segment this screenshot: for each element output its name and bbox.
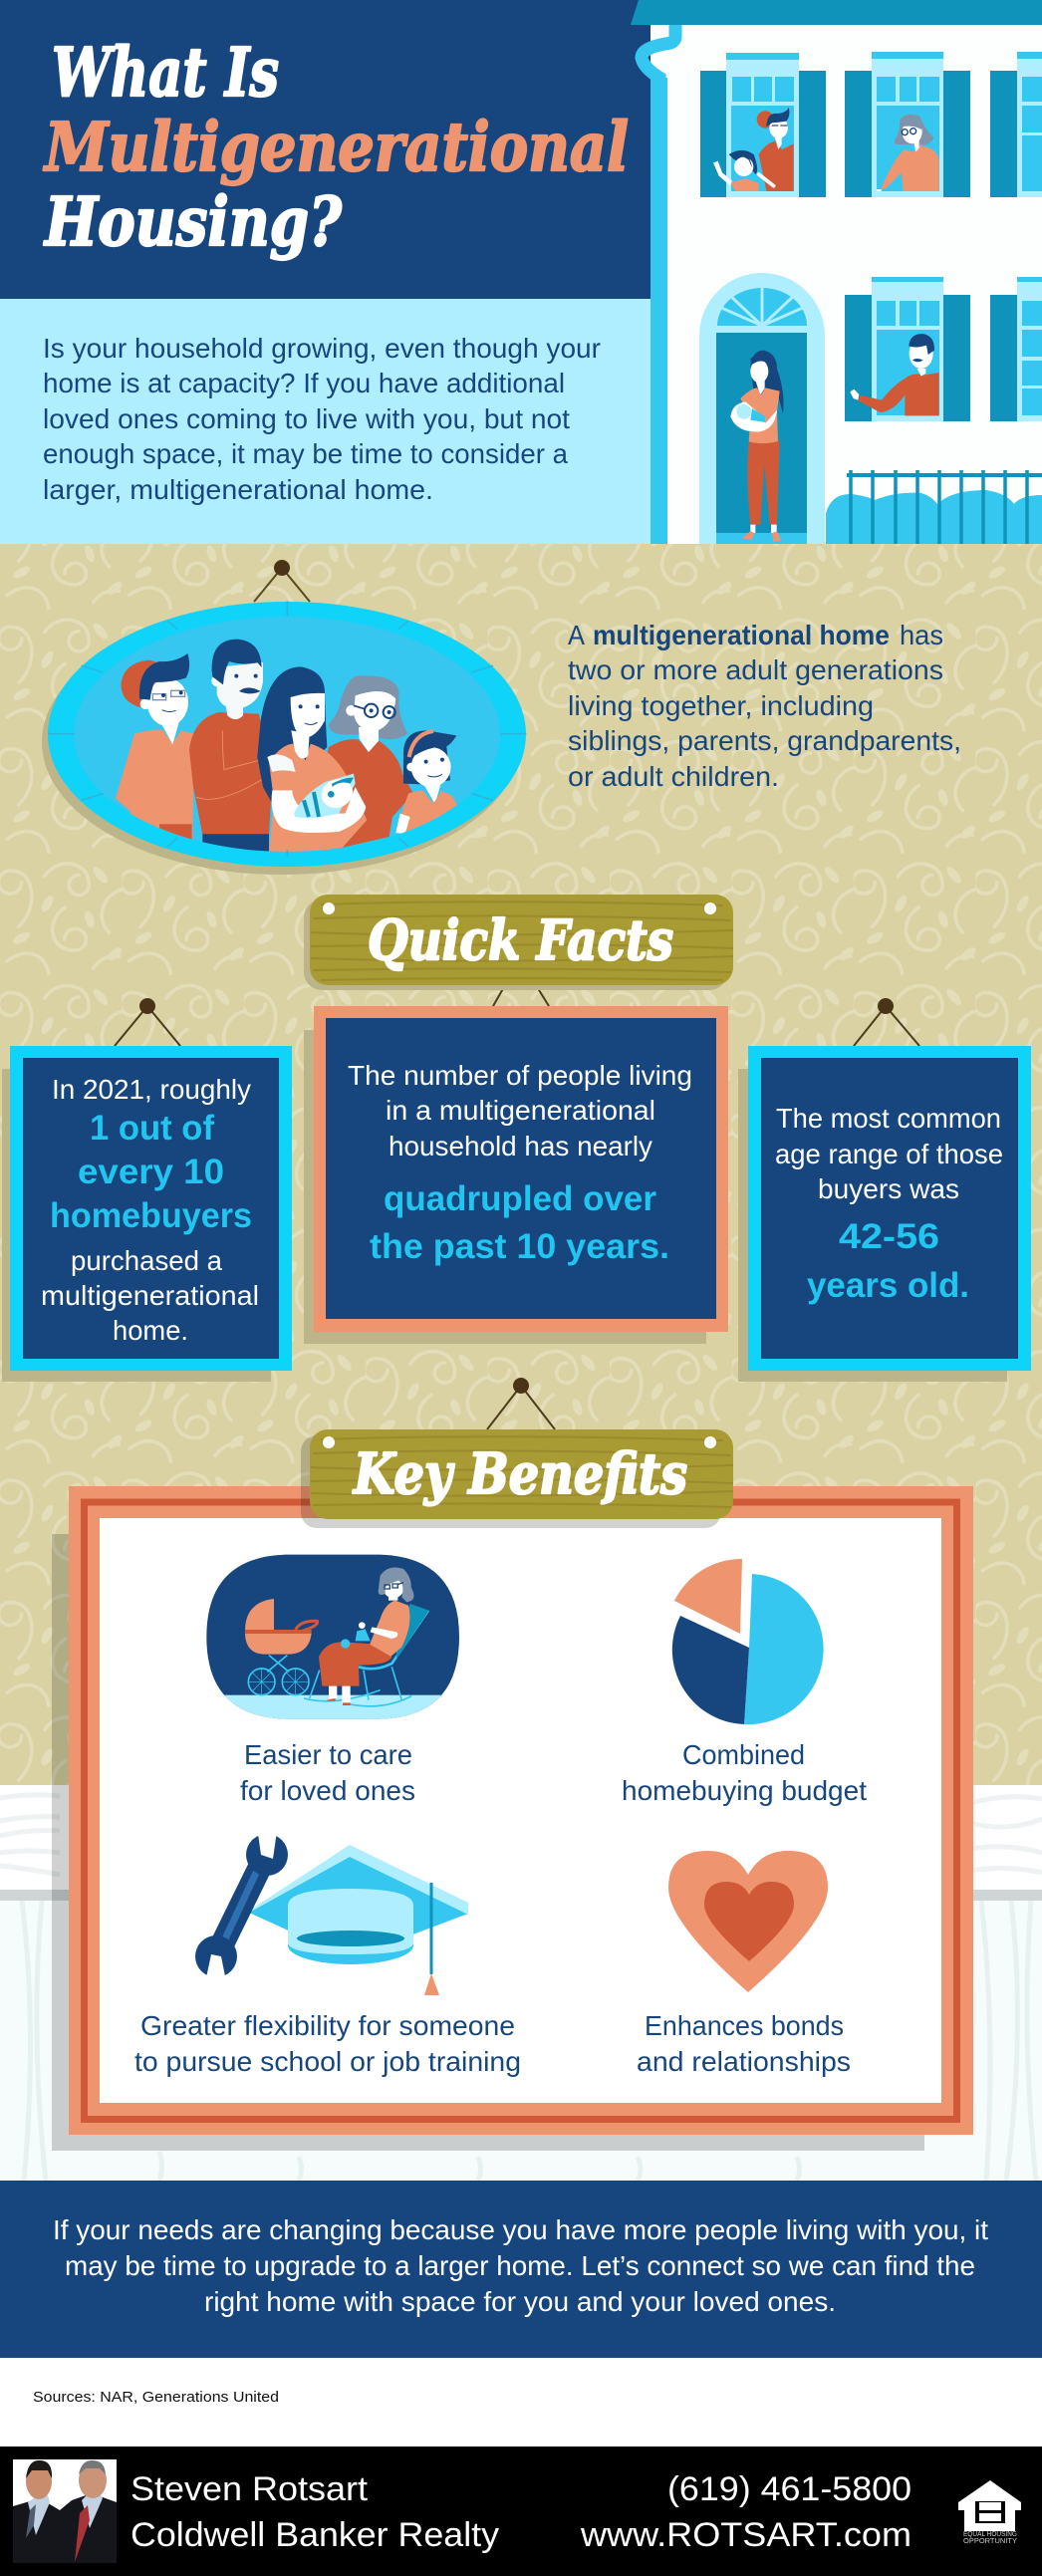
woman holding baby: [730, 351, 784, 542]
window: boy and girl: [700, 53, 826, 197]
panel: key benefits: [52, 1378, 973, 2151]
card: most common age range: [738, 1046, 1031, 1382]
family portrait: [42, 560, 526, 875]
card: 1 out of every 10 homebuyers: multigenerational: [41, 1280, 259, 1311]
heading sign: Quick Facts: Quick Facts: [368, 907, 673, 972]
panel: call to action: If your needs are changing because you have more people living with you, it: [53, 2214, 988, 2245]
intro text: [43, 333, 601, 505]
label: greater flexibility: Greater flexibility for someone: [140, 2010, 515, 2041]
card: most common age range: age range of those: [775, 1139, 1003, 1169]
card: most common age range: years old.: [807, 1266, 969, 1305]
strings: quick facts cards: [115, 985, 919, 1046]
label: greater flexibility: [134, 2010, 521, 2077]
door with arch: [699, 273, 825, 544]
panel: call to action: right home with space for you and your loved ones.: [204, 2286, 836, 2317]
label: easier to care: Easier to care: [244, 1739, 412, 1770]
card: quadrupled over the past 10 years: The number of people living: [348, 1060, 692, 1091]
definition text: siblings, parents, grandparents,: [568, 725, 961, 756]
father: [189, 640, 272, 854]
agent photo: [13, 2459, 117, 2563]
label: easier to care: for loved ones: [240, 1775, 415, 1806]
card: quadrupled over the past 10 years: quadrupled over: [384, 1179, 656, 1218]
grandmother: [319, 675, 413, 850]
label: enhances bonds: Enhances bonds: [645, 2010, 844, 2041]
intro text: enough space, it may be time to consider a: [43, 438, 568, 469]
panel frame: [69, 1486, 973, 2135]
panel: floor background: [0, 1785, 1042, 2181]
icon: wrench and graduation cap: [195, 1827, 468, 1995]
card: quadrupled over the past 10 years: the past 10 years.: [370, 1227, 669, 1266]
title: What Is: [52, 33, 279, 112]
title: Housing?: [43, 182, 343, 261]
contact details: [580, 2470, 912, 2554]
string and nail: [487, 1378, 555, 1429]
contact details: (619) 461-5800: [667, 2470, 912, 2508]
definition text: [568, 620, 961, 792]
card: quadrupled over the past 10 years: in a multigenerational: [386, 1095, 655, 1126]
hanging string and nail: [254, 560, 310, 602]
shrubs: [826, 490, 1042, 544]
intro text: loved ones coming to live with you, but not: [43, 403, 570, 434]
panel: wallpaper background: [0, 544, 1042, 1785]
roof: [631, 0, 1042, 25]
fence: [847, 470, 1042, 544]
agent name: [130, 2470, 499, 2554]
icon: grandmother in rocking chair with pram: [206, 1555, 459, 1720]
label: easier to care: [240, 1739, 415, 1806]
panel shadow: [52, 1534, 924, 2151]
card: 1 out of every 10 homebuyers: homebuyers: [50, 1196, 252, 1235]
card: 1 out of every 10 homebuyers: [2, 1046, 292, 1382]
drain pipe: [642, 25, 675, 544]
icon: equal housing opportunity: EQUAL HOUSING: [963, 2531, 1017, 2538]
mother holding baby: [257, 666, 367, 852]
definition text: living together, including: [568, 690, 874, 721]
window: man waving: [845, 277, 970, 421]
card: 1 out of every 10 homebuyers: every 10: [78, 1153, 224, 1191]
icon: heart: [668, 1851, 828, 1992]
footer bar: [0, 2447, 1042, 2576]
agent name: Steven Rotsart: [130, 2470, 369, 2508]
girl: [395, 730, 457, 842]
panel: sources background: [0, 2358, 1042, 2447]
contact details: www.ROTSART.com: [580, 2516, 912, 2554]
card: 1 out of every 10 homebuyers: purchased a: [71, 1245, 222, 1276]
icon: equal housing opportunity: [958, 2480, 1021, 2545]
card: 1 out of every 10 homebuyers: home.: [113, 1315, 188, 1346]
definition text: two or more adult generations: [568, 654, 943, 685]
definition text: A: [568, 620, 585, 650]
label: greater flexibility: to pursue school or job training: [134, 2046, 521, 2077]
panel: call to action: may be time to upgrade to a larger home. Let’s connect so we can find the: [65, 2250, 975, 2281]
card: quadrupled over the past 10 years: [304, 1006, 728, 1344]
card: most common age range: buyers was: [818, 1173, 959, 1204]
window: grandmother: [845, 52, 970, 197]
card: 1 out of every 10 homebuyers: 1 out of: [90, 1109, 214, 1148]
label: combined budget: [622, 1739, 867, 1806]
title: Multigenerational: [43, 108, 629, 186]
panel: intro background: [0, 299, 651, 544]
card: most common age range: The most common: [776, 1103, 1001, 1134]
window: top right: [990, 52, 1042, 197]
definition text: multigenerational home: [593, 620, 890, 650]
definition text: or adult children.: [568, 761, 779, 792]
card: most common age range: 42-56: [839, 1217, 939, 1256]
icon: equal housing opportunity: OPPORTUNITY: [963, 2538, 1017, 2545]
oval frame seams: [48, 601, 526, 857]
intro text: larger, multigenerational home.: [43, 474, 433, 505]
intro text: Is your household growing, even though your: [43, 333, 601, 364]
panel: call to action: [0, 2181, 1042, 2358]
card: quadrupled over the past 10 years: household has nearly: [389, 1131, 652, 1161]
card: 1 out of every 10 homebuyers: In 2021, roughly: [52, 1074, 251, 1105]
label: combined budget: homebuying budget: [622, 1775, 867, 1806]
illustration: house: [631, 0, 1042, 544]
label: combined budget: Combined: [682, 1739, 805, 1770]
definition text: has: [900, 620, 943, 650]
heading sign: Key Benefits: [301, 1429, 733, 1528]
label: enhances bonds: [637, 2010, 851, 2077]
intro text: home is at capacity? If you have additional: [43, 368, 565, 398]
boy with glasses: [116, 653, 194, 840]
wrench: [195, 1827, 288, 1986]
window: lower right: [990, 277, 1042, 421]
agent name: Coldwell Banker Realty: [130, 2516, 499, 2554]
heading sign: Quick Facts: [304, 895, 733, 990]
title: [43, 33, 629, 261]
heading sign: Key Benefits: Key Benefits: [352, 1441, 687, 1507]
panel: title background: [0, 0, 651, 299]
icon: pie chart: [672, 1559, 824, 1724]
label: enhances bonds: and relationships: [637, 2046, 851, 2077]
sources: Sources: NAR, Generations United: [33, 2389, 279, 2406]
